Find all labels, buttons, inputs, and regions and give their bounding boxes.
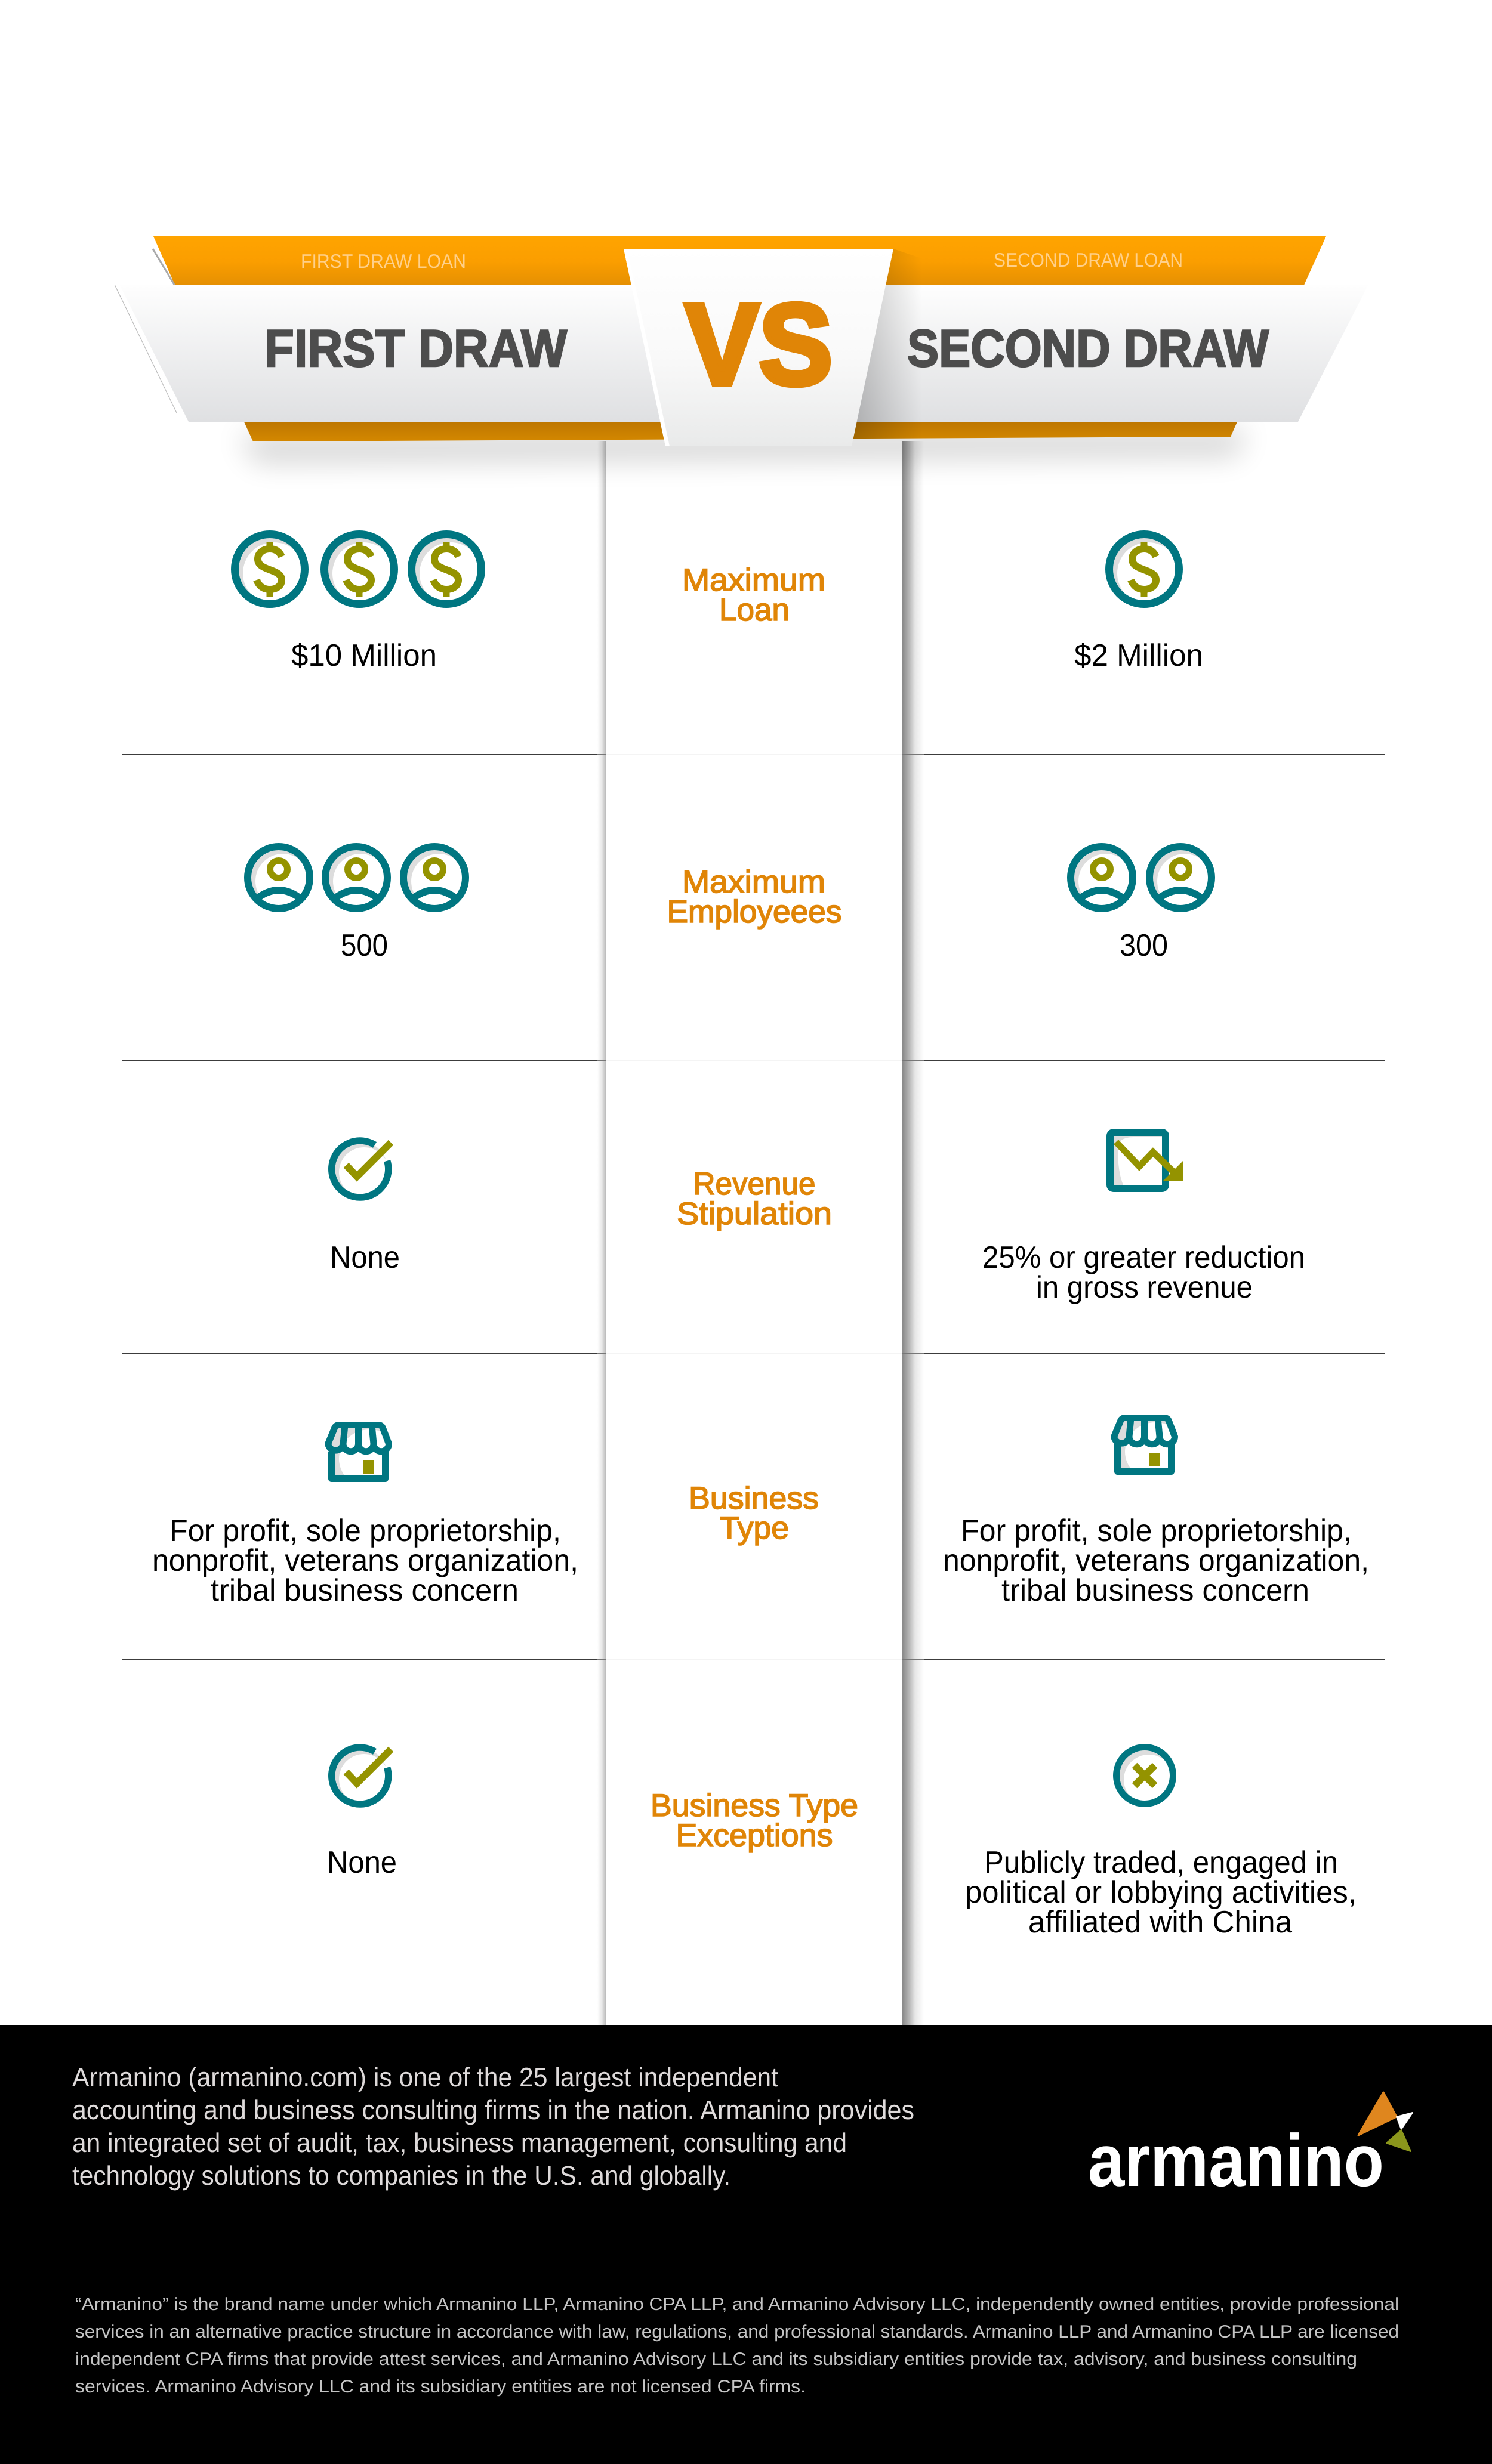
row label: Type <box>720 1511 789 1546</box>
second draw value: 25% or greater reduction <box>982 1240 1305 1275</box>
icon: storefront <box>328 1425 400 1488</box>
ribbon label: first draw loan: FIRST DRAW LOAN <box>301 250 466 272</box>
second draw value: affiliated with China <box>1028 1905 1292 1940</box>
icon: three people <box>248 847 466 909</box>
first draw value: nonprofit, veterans organization, <box>152 1543 578 1578</box>
first draw value: For profit, sole proprietorship, <box>169 1514 561 1548</box>
row label: Loan <box>719 592 790 628</box>
row label: Employeees <box>667 894 841 930</box>
row 4: business type <box>152 1418 1369 1608</box>
row label: Maximum <box>682 563 825 598</box>
first draw value: None <box>330 1240 400 1275</box>
second draw value: For profit, sole proprietorship, <box>961 1514 1352 1548</box>
legal disclaimer: independent CPA firms that provide attest services, and Armanino Advisory LLC and its subsidiary entities provide tax, advisory, and business consulting <box>75 2349 1357 2369</box>
second draw heading: SECOND DRAW <box>907 319 1269 378</box>
left panel edge line <box>115 285 177 413</box>
icon: one dollar coin <box>1109 535 1179 604</box>
legal disclaimer: “Armanino” is the brand name under which Armanino LLP, Armanino CPA LLP, and Armanino Advisory LLC, independently owned entities, provide professional <box>75 2295 1399 2314</box>
row 5: business type exceptions <box>327 1747 1357 1940</box>
icon: check mark <box>332 1141 391 1197</box>
VS panel <box>624 249 893 446</box>
row 3: revenue stipulation <box>330 1132 1305 1305</box>
top orange ribbon <box>153 236 1326 286</box>
second draw value: tribal business concern <box>1001 1573 1309 1608</box>
second draw value: nonprofit, veterans organization, <box>943 1543 1369 1578</box>
icon: check mark <box>332 1747 391 1804</box>
logo: armanino: armanino <box>1088 2120 1384 2202</box>
header drop shadow <box>239 431 1247 462</box>
row 1: maximum loan <box>235 535 1203 673</box>
left white panel <box>119 285 716 422</box>
second draw value: in gross revenue <box>1036 1270 1253 1305</box>
icon: three dollar coins <box>235 535 482 604</box>
about text: Armanino (armanino.com) is one of the 25 largest independent <box>72 2062 778 2092</box>
row 2: maximum employees <box>248 847 1212 963</box>
right white panel <box>776 285 1368 422</box>
about text: technology solutions to companies in the U.S. and globally. <box>72 2160 730 2191</box>
row label: Business Type <box>651 1788 858 1823</box>
icon: x mark <box>1116 1747 1174 1805</box>
legal disclaimer: services in an alternative practice structure in accordance with law, regulations, and professional standards. Armanino LLP and Armanino CPA LLP are licensed <box>75 2322 1399 2342</box>
first draw heading: FIRST DRAW <box>264 319 567 378</box>
row label: Revenue <box>693 1166 815 1202</box>
ribbon label: second draw loan: SECOND DRAW LOAN <box>994 249 1183 271</box>
legal disclaimer: services. Armanino Advisory LLC and its subsidiary entities are not licensed CPA firms. <box>75 2377 806 2397</box>
bottom orange ribbon <box>243 421 1238 441</box>
footer panel <box>0 2025 1492 2464</box>
second draw value: $2 Million <box>1074 638 1203 673</box>
first draw value: 500 <box>341 928 388 963</box>
second draw value: 300 <box>1120 928 1168 963</box>
second draw value: political or lobbying activities, <box>965 1875 1357 1910</box>
VS panel highlight <box>624 249 670 446</box>
center comparison column <box>597 441 924 2025</box>
about text: an integrated set of audit, tax, business management, consulting and <box>72 2128 847 2158</box>
ribbon edge sliver <box>153 249 174 285</box>
header banner <box>115 236 1368 462</box>
row label: Stipulation <box>677 1196 832 1231</box>
icon: storefront <box>1114 1418 1186 1481</box>
second draw value: Publicly traded, engaged in <box>984 1845 1338 1880</box>
icon: two people <box>1071 847 1212 909</box>
row label: Exceptions <box>676 1818 833 1853</box>
icon: declining revenue chart <box>1110 1132 1183 1188</box>
row label: Maximum <box>682 864 825 900</box>
first draw value: tribal business concern <box>211 1573 519 1608</box>
VS panel shadow <box>852 249 934 439</box>
row label: Business <box>689 1481 819 1516</box>
first draw value: $10 Million <box>291 638 437 673</box>
about text: accounting and business consulting firms in the nation. Armanino provides <box>72 2095 914 2125</box>
VS text: VS <box>685 280 833 409</box>
row divider lines <box>122 755 1385 1660</box>
first draw value: None <box>327 1845 397 1880</box>
